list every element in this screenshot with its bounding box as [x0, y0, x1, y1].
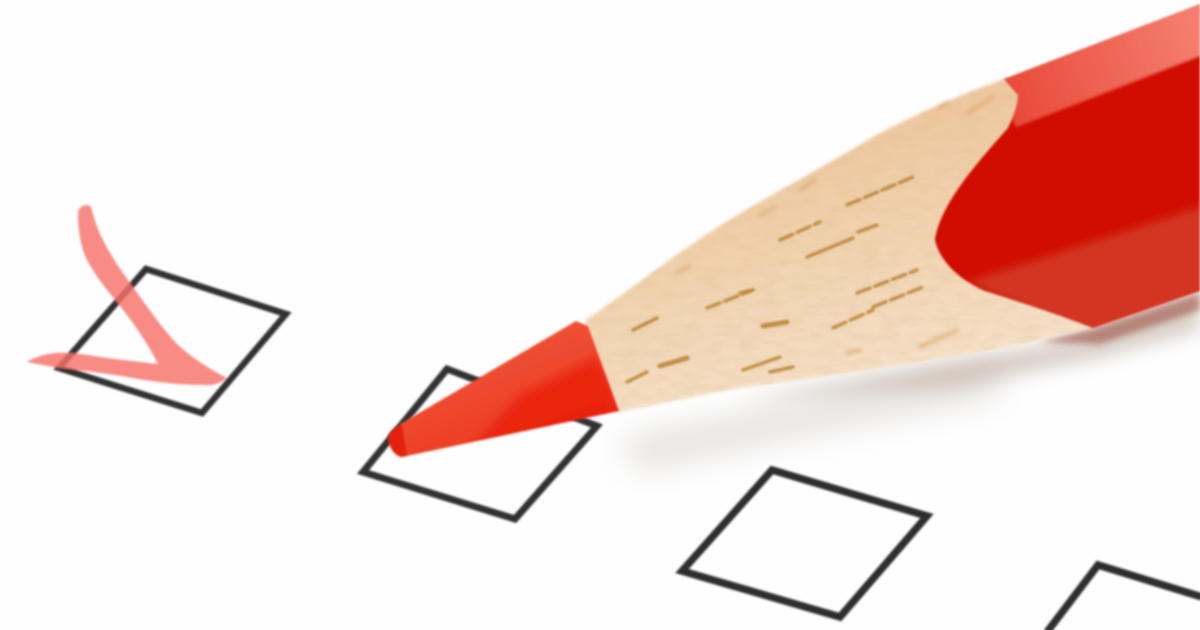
checkbox 2 — [363, 369, 597, 519]
check mark — [27, 205, 227, 385]
red pencil body — [935, 0, 1200, 335]
checkbox 4 — [1047, 565, 1200, 630]
pencil — [385, 0, 1200, 460]
checkbox 1 with red check mark — [27, 205, 286, 413]
wood grain — [627, 97, 993, 382]
upper facet highlight — [990, 0, 1200, 127]
wood cone — [585, 79, 1093, 412]
lower facet — [968, 204, 1200, 335]
checkbox 3 — [682, 470, 927, 617]
lead tip — [385, 321, 625, 460]
pencil shadow — [620, 292, 1200, 470]
wood texture — [603, 79, 1074, 412]
